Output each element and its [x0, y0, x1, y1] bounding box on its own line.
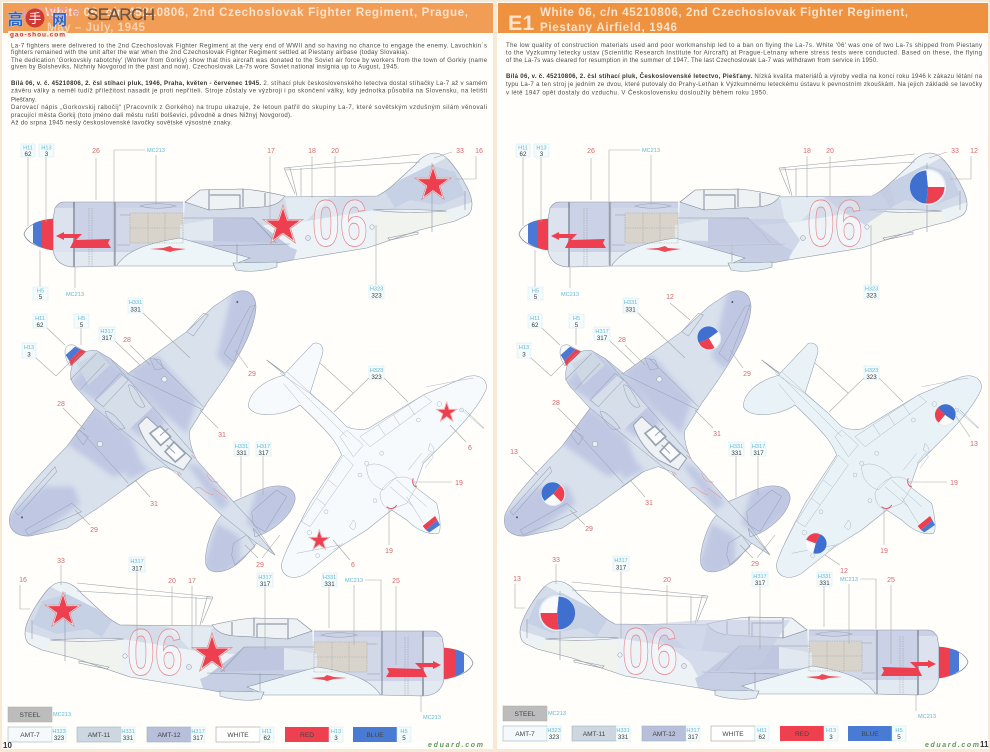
text block left: given by Bolsheviks, Nizhniy Novgorod in the past and now). Czechoslovak La-7s wore Soviet national insignia up to August, 1945.	[11, 64, 399, 70]
paint legend right: BLUE	[861, 731, 879, 738]
callouts: left profile upper: 17	[267, 148, 275, 155]
callouts: left profile upper: H323	[370, 286, 383, 292]
callouts: right profile upper: 26	[587, 148, 595, 155]
paint legend left: H13	[331, 729, 341, 735]
title banner left	[3, 3, 493, 34]
aircraft: left profile upper	[24, 150, 480, 271]
callouts: right profile lower: H331	[818, 574, 831, 580]
callouts: right profile lower: MC213	[918, 714, 936, 720]
callouts: left profile lower: 20	[168, 578, 176, 585]
page number left: 10	[3, 741, 12, 750]
title banner right: Piestany Airfield, 1946	[540, 21, 678, 34]
paint legend left	[8, 707, 411, 742]
callouts: left profile lower: 331	[324, 581, 335, 588]
callouts: right plan views: 28	[618, 337, 626, 344]
paint legend right: H331	[616, 728, 630, 734]
page number right: 11	[980, 740, 989, 749]
callouts: right profile upper: H323	[865, 286, 878, 292]
callouts: left plan views: 28	[123, 337, 131, 344]
callouts: right profile lower: 20	[663, 577, 671, 584]
paint legend left: H11	[262, 729, 272, 735]
paint legend right	[503, 706, 906, 741]
callouts: right plan views: 13	[970, 441, 978, 448]
callouts: left plan views: H331	[129, 300, 142, 306]
watermark: SEARCH	[87, 5, 155, 24]
paint legend left: 317	[193, 735, 204, 742]
aircraft: right profile upper	[519, 150, 975, 271]
callouts: right plan views: H11	[530, 316, 540, 322]
callouts: right profile lower: 13	[513, 576, 521, 583]
callouts: right plan views: H317	[595, 329, 609, 335]
callouts: right profile lower: MC213	[840, 577, 858, 583]
title banner left: White 06, c/n 45210806, 2nd Czechoslovak Fighter Regiment, Prague,	[45, 6, 468, 19]
callouts: right profile upper: 33	[951, 148, 959, 155]
callouts: right plan views: 317	[753, 450, 764, 457]
callouts: right profile upper	[516, 144, 978, 301]
paint legend left: 3	[334, 735, 338, 742]
callouts: left plan views: 62	[37, 322, 44, 329]
watermark: 高	[7, 10, 24, 29]
callouts: right plan views: 28	[552, 400, 560, 407]
paint legend left: H331	[121, 729, 135, 735]
text block left: závěru války a neměl tudíž příležitost nasadit je proti nepříteli. Stroje zůstaly ve výzbroji i po skončení války, kdy jednotka působila na Slovensku, na letišti	[11, 88, 487, 94]
callouts: left plan views: H5	[78, 316, 85, 322]
callouts: right plan views: H13	[519, 345, 529, 351]
callouts: right profile upper: H11	[518, 146, 528, 152]
text block left: pracující města Gorkij (toto jméno dali městu ruští bolševici, původně a dnes Nižnyj Novgorod).	[11, 112, 292, 119]
aircraft: right top view	[502, 287, 795, 577]
callouts: left profile lower: H331	[323, 575, 336, 581]
callouts: right plan views: 31	[713, 431, 721, 438]
callouts: left plan views: 317	[258, 450, 269, 457]
paint legend left: 5	[402, 735, 406, 742]
callouts: right plan views: 29	[743, 371, 751, 378]
callouts: left plan views: H323	[370, 368, 383, 374]
callouts: left profile lower: MC213	[345, 578, 363, 584]
callouts: left profile lower: 317	[132, 566, 143, 572]
watermark: gao-shou.com	[10, 32, 65, 38]
callouts: left profile lower: 17	[188, 578, 196, 585]
callouts: right plan views: 62	[532, 322, 539, 329]
paint legend right: RED	[795, 731, 809, 738]
callouts: left plan views: 31	[218, 432, 226, 439]
callouts: left plan views: 317	[102, 335, 113, 342]
callouts: right plan views: 12	[666, 294, 674, 301]
aircraft: left profile upper: 06	[312, 187, 368, 261]
callouts: left profile lower	[19, 557, 441, 721]
callouts: right profile upper: 62	[520, 151, 527, 158]
text block right: The low quality of construction materials used and poor workmanship led to a ban on flying the La-7s. White '06' was one of two La-7s shipped from Piestany	[506, 42, 983, 49]
callouts: right profile upper: 18	[803, 148, 811, 155]
paint legend right: 3	[829, 734, 833, 741]
callouts: left profile upper: 18	[308, 148, 316, 155]
callouts: right profile upper: 5	[534, 294, 538, 301]
panel: right page	[497, 2, 989, 749]
callouts: left plan views: H13	[24, 345, 34, 351]
paint legend right: AMT-11	[583, 731, 606, 738]
paint legend left: 62	[264, 735, 271, 742]
panel: left page	[2, 2, 493, 750]
callouts: left profile lower: 317	[260, 581, 271, 588]
callouts: left profile upper: 20	[331, 148, 339, 155]
callouts: right plan views: 19	[950, 480, 958, 487]
callouts: right profile upper: H5	[532, 288, 539, 294]
text block left: Až do srpna 1945 nesly československé lavočky sovětské výsostné znaky.	[11, 120, 232, 126]
callouts: left plan views: H11	[35, 316, 45, 322]
paint legend right: H5	[895, 728, 903, 734]
paint legend right: H13	[826, 728, 836, 734]
callouts: left profile upper: 323	[371, 292, 382, 300]
text block left: Darovací nápis „Gorkovskij rabočij“ (Pracovník z Gorkého) na trupu ukazuje, že letoun patřil do skupiny La-7, které sovětským vzdušným silám věnovali	[11, 104, 487, 111]
callouts: right plan views: 29	[751, 561, 759, 568]
callouts: left plan views: H331	[235, 444, 248, 450]
callouts: left plan views	[22, 298, 472, 569]
aircraft: left underside view	[248, 343, 486, 577]
callouts: left profile lower: MC213	[423, 715, 441, 721]
paint legend left: MC213	[53, 712, 71, 718]
paint legend left: H317	[191, 729, 205, 735]
text block left	[11, 42, 488, 126]
callouts: right profile upper: MC213	[642, 148, 660, 154]
text block left: Piešťany.	[11, 96, 37, 104]
paint legend left: H5	[400, 729, 408, 735]
callouts: right profile lower: H317	[614, 558, 628, 564]
callouts: right plan views: H331	[624, 300, 637, 306]
callouts: right profile lower: 25	[887, 577, 895, 584]
callouts: left profile upper	[21, 144, 483, 301]
callouts: left plan views: 331	[130, 306, 141, 314]
watermark	[7, 4, 155, 38]
paint legend left: AMT-7	[20, 732, 40, 739]
paint legend right: 62	[759, 734, 766, 741]
text block left: fighters remained with the unit after the war when the 2nd Czechoslovak Fighter Regiment settled at Piestany airbase (today Slovakia).	[11, 49, 409, 56]
callouts: right profile lower: 33	[552, 557, 560, 564]
title banner right	[498, 3, 988, 35]
aircraft: right underside view	[743, 343, 981, 577]
paint legend right: H317	[686, 728, 700, 734]
publisher mark right: eduard.com	[925, 742, 979, 749]
paint legend left: STEEL	[20, 712, 41, 719]
callouts: right plan views: 323	[866, 374, 877, 381]
callouts: left plan views: 28	[57, 401, 65, 408]
text block right: to the Vyzkumny letecky ustav (Scientific Research Institute for Aircraft) at Prague-Letnany where stress tests were conducted. Based on these, the flying	[506, 50, 982, 56]
callouts: right profile upper: 12	[970, 148, 978, 155]
callouts: left profile upper: H11	[23, 146, 33, 152]
text block left: La-7 fighters were delivered to the 2nd Czechoslovak Fighter Regiment at the very end of WWII and so having no chance to engage the enemy. Lavochkin´s	[11, 42, 487, 50]
callouts: right plan views: 31	[645, 500, 653, 507]
callouts: left plan views: H317	[100, 329, 114, 335]
paint legend right: H11	[757, 728, 767, 734]
callouts: right plan views: 12	[840, 568, 848, 575]
callouts: right plan views: 331	[731, 450, 742, 457]
callouts: left profile upper: H5	[37, 288, 44, 294]
text block right: v létě 1947 opět dostaly do vzduchu. V Československu dosloužily během roku 1950.	[506, 90, 768, 96]
text block right	[506, 42, 983, 96]
callouts: left plan views: 323	[371, 374, 382, 381]
callouts: right plan views: 19	[880, 548, 888, 555]
paint legend right: MC213	[548, 711, 566, 717]
aircraft: right profile lower	[512, 578, 968, 699]
callouts: left profile lower: 25	[392, 578, 400, 585]
callouts: right plan views: H323	[865, 368, 878, 374]
callouts: left plan views: 331	[236, 450, 247, 457]
callouts: left plan views: 31	[150, 501, 158, 508]
callouts: left plan views: 29	[90, 527, 98, 534]
callouts: right plan views: 29	[585, 526, 593, 533]
callouts: right plan views: 331	[625, 306, 636, 314]
publisher mark left: eduard.com	[428, 742, 483, 749]
callouts: left profile lower: 16	[19, 577, 27, 584]
callouts: left profile lower: H317	[258, 575, 272, 581]
title banner left: May – July, 1945	[47, 21, 146, 34]
callouts: left plan views: 29	[248, 371, 256, 378]
paint legend right: 5	[897, 734, 901, 741]
paint legend left: RED	[300, 732, 314, 739]
paint legend left: WHITE	[227, 732, 249, 739]
paint legend left: AMT-11	[88, 732, 111, 739]
callouts: left profile upper: 26	[92, 148, 100, 155]
text block left: The dedication 'Gorkovskiy rabotchiy' (Worker from Gorkiy) show that this aircraft was donated to the Soviet air force by workers from the town of Gorkiy (name	[11, 57, 488, 64]
paint legend right: 331	[618, 734, 629, 741]
text block right: of the La-7s was cleared for resumption in the summer of 1947. The last Czechoslovak La-7 was withdrawn from service in 1950.	[506, 57, 878, 64]
callouts: left profile upper: H13	[41, 146, 52, 152]
callouts: right plan views: H5	[573, 316, 580, 322]
paint legend right: AMT-12	[652, 731, 676, 738]
callouts: left profile lower: H317	[130, 559, 144, 565]
paint legend left: H323	[52, 729, 66, 735]
callouts: left profile upper: MC213	[147, 148, 165, 154]
paint legend left: 331	[123, 735, 134, 742]
callouts: right plan views	[510, 294, 978, 575]
paint legend right: 317	[688, 734, 699, 741]
aircraft: left profile lower	[17, 579, 473, 700]
callouts: left profile upper: 62	[25, 151, 32, 158]
paint legend right: H323	[547, 728, 561, 734]
callouts: left profile upper: MC213	[66, 292, 84, 298]
callouts: left profile lower: 33	[57, 558, 65, 565]
aircraft: right profile lower: 06	[622, 615, 678, 689]
text block left: Bílá 06, v. č. 45210806, 2. čsl stíhací pluk, 1946, Praha, květen - červenec 1945. 2. stíhací pluk československého letectva dostal stíhačky La-7 až v samém	[11, 80, 487, 87]
callouts: right profile upper: 3	[540, 151, 544, 158]
watermark: HOBBY	[22, 4, 82, 23]
text block right: typu La-7 a ten stroj je jedním ze dvou, které putovaly do Prahy-Letňan k Výzkumnému leteckému ústavu k pevnostním zkouškám. Na jejich základě se lavočky	[506, 81, 983, 88]
callouts: left plan views: 6	[351, 562, 355, 569]
callouts: right profile lower	[513, 556, 936, 720]
aircraft: right profile upper: 06	[807, 187, 863, 261]
callouts: left plan views: 6	[468, 445, 472, 452]
callouts: right profile upper: 323	[866, 292, 877, 300]
callouts: left plan views: 19	[455, 480, 463, 487]
callouts: right profile lower: 331	[819, 580, 830, 587]
paint legend right: 323	[549, 734, 560, 741]
aircraft: left top view	[7, 287, 300, 577]
watermark: 手	[28, 11, 42, 26]
watermark: 网	[52, 12, 67, 29]
paint legend left: AMT-12	[157, 732, 181, 739]
callouts: left plan views: 5	[80, 322, 84, 329]
callouts: right profile lower: 317	[616, 564, 627, 572]
callouts: right plan views: 5	[575, 322, 579, 329]
paint legend left: BLUE	[366, 732, 384, 739]
callouts: right plan views: H331	[730, 444, 743, 450]
callouts: left profile upper: 3	[45, 151, 49, 158]
callouts: left profile upper: 33	[456, 148, 464, 155]
callouts: right plan views: 3	[522, 352, 526, 358]
callouts: right plan views: 317	[597, 335, 608, 342]
callouts: right profile upper: 20	[826, 148, 834, 155]
paint legend right: STEEL	[515, 711, 536, 718]
callouts: left plan views: 19	[385, 548, 393, 555]
title banner right: E1	[508, 11, 534, 35]
title banner right: White 06, c/n 45210806, 2nd Czechoslovak Fighter Regiment,	[540, 6, 908, 19]
callouts: left profile upper: 16	[475, 148, 483, 155]
text block right: Bílá 06, v. č. 45210806, 2. čsl stíhací pluk, Československé letectvo, Piešťany. Nízká kvalita materiálů a výroby vedla na konci roku 1946 k zákazu létání na	[506, 73, 983, 80]
callouts: right plan views: H317	[752, 444, 765, 450]
callouts: right profile lower: H317	[753, 574, 767, 580]
callouts: left plan views: H317	[257, 444, 270, 450]
paint legend right: WHITE	[722, 731, 744, 738]
callouts: left plan views: 29	[256, 562, 264, 569]
callouts: left plan views: 3	[27, 352, 31, 358]
callouts: right profile upper: H13	[536, 146, 547, 152]
callouts: right profile lower: 317	[755, 580, 766, 587]
callouts: left profile upper: 5	[39, 294, 43, 301]
paint legend right: AMT-7	[515, 731, 535, 738]
callouts: right profile upper: MC213	[561, 292, 579, 298]
aircraft: left profile lower: 06	[127, 616, 183, 690]
paint legend left: 323	[54, 735, 65, 742]
callouts: right plan views: 13	[510, 449, 518, 456]
